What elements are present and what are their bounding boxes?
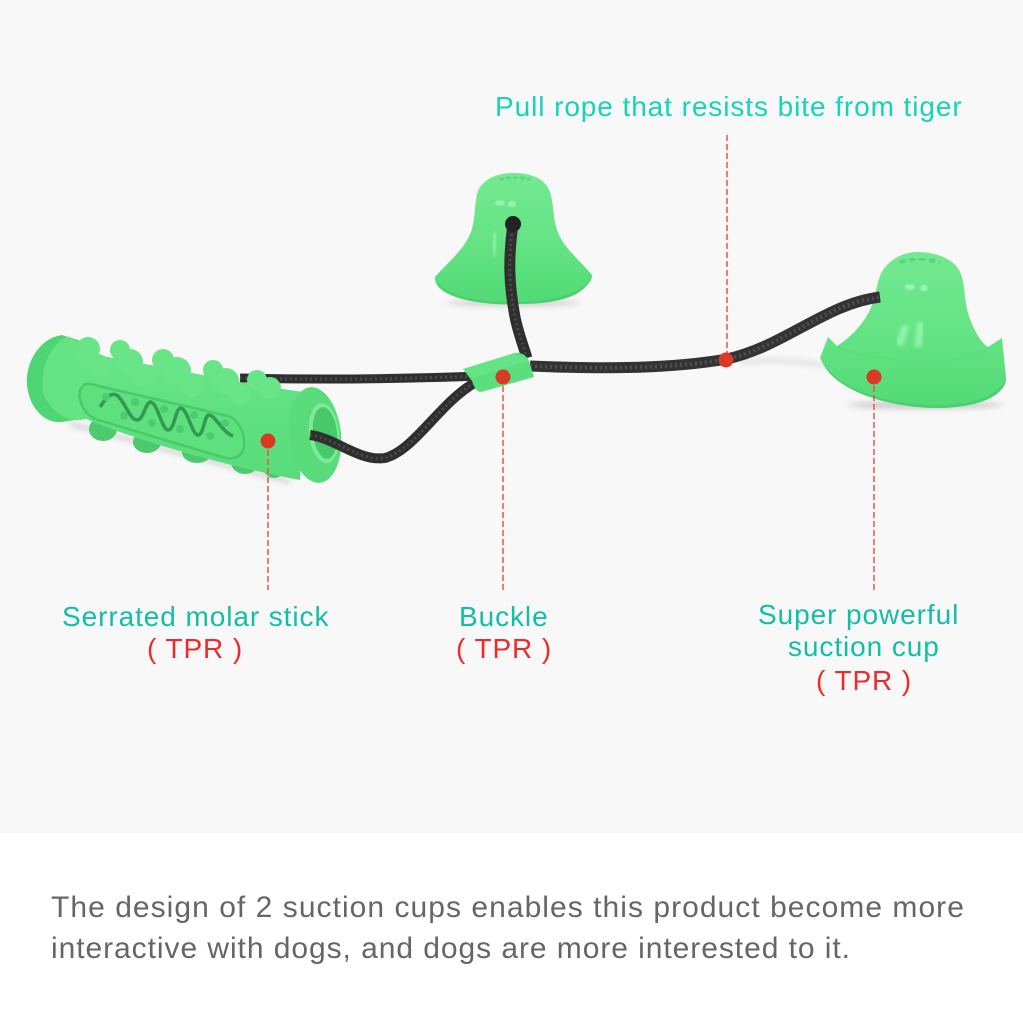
label: buckle: Buckle bbox=[459, 601, 549, 632]
callout line: suction cup bbox=[866, 370, 882, 590]
callout line: buckle bbox=[496, 370, 510, 590]
callout line: stick bbox=[260, 434, 276, 590]
description text: The design of 2 suction cups enables this product become more bbox=[51, 891, 965, 924]
callout line: rope bbox=[718, 135, 734, 368]
rope: strand to right suction cup bbox=[530, 297, 880, 368]
right suction cup bbox=[820, 252, 1006, 408]
soft shadows bbox=[70, 300, 1003, 482]
flare bbox=[27, 335, 88, 422]
buckle bbox=[463, 353, 534, 392]
rope: lower strand from stick to buckle bbox=[310, 382, 476, 458]
rope: strand down from top suction cup bbox=[505, 216, 527, 358]
label: buckle material: ( TPR ) bbox=[456, 633, 552, 664]
top teeth bbox=[76, 337, 281, 406]
label: molar stick: Serrated molar stick bbox=[62, 601, 329, 632]
rope: upper strand from stick to buckle bbox=[240, 376, 480, 379]
groove dots bbox=[102, 393, 229, 440]
label: suction cup line two: suction cup bbox=[788, 631, 940, 662]
description text: interactive with dogs, and dogs are more interested to it. bbox=[51, 932, 851, 965]
bottom teeth bbox=[89, 417, 284, 478]
body bbox=[80, 352, 304, 480]
label: molar stick material: ( TPR ) bbox=[147, 633, 243, 664]
label: pull rope: Pull rope that resists bite from tiger bbox=[495, 91, 963, 122]
label: suction cup: Super powerful bbox=[758, 599, 959, 630]
description text bbox=[51, 891, 965, 965]
top suction cup bbox=[435, 173, 592, 304]
label: suction cup material: ( TPR ) bbox=[816, 665, 912, 696]
molar stick bbox=[27, 335, 346, 485]
groove panel bbox=[80, 384, 244, 458]
right end bbox=[284, 385, 346, 485]
